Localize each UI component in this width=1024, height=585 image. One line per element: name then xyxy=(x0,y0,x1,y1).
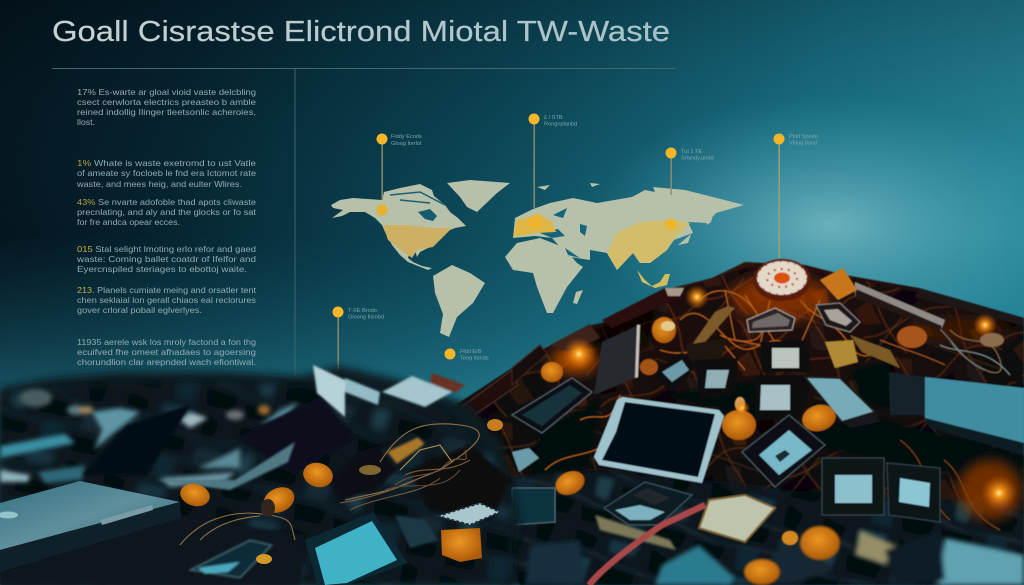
orange spools right xyxy=(541,317,1004,585)
pin: asia: Srlandy,undd xyxy=(681,156,714,162)
teal monitor xyxy=(305,512,408,585)
text block 6: 11935 aerele wsk los mroly factond a fon thg xyxy=(77,337,256,347)
pin: east xyxy=(774,134,818,258)
column divider xyxy=(294,68,296,376)
pile clutter texture xyxy=(440,268,1024,500)
text block 5: 213. Planels cumiate meing and orsatler tent xyxy=(77,285,257,295)
pin: south america: Gloong Ilsmbd xyxy=(348,314,384,320)
upper chips xyxy=(652,303,900,420)
highlighted USA xyxy=(383,225,452,258)
black laptop left xyxy=(83,405,190,475)
pin: asia: Tut 1 TE xyxy=(681,149,702,155)
square chip centre xyxy=(742,415,825,487)
text block 6: ecuifved fhe omeet afhadaes to agoersing xyxy=(77,347,256,357)
highlighted Asia xyxy=(607,220,690,270)
orange spools left xyxy=(178,419,503,564)
socket chip 1 xyxy=(822,458,884,515)
text block 3: 43% Se nvarte adofoble thad apots cliwaste xyxy=(77,197,256,207)
white tilted panels xyxy=(313,365,465,417)
text block 1: reined indollig Ilinger tleetsonlic acheroies, xyxy=(77,107,256,117)
location pins xyxy=(332,114,818,371)
pin: east: Pldd Soodo xyxy=(789,134,818,140)
main e-waste pile xyxy=(430,259,1024,585)
sea cut-outs xyxy=(540,208,587,258)
text block 4: Eyercnspiled steriages to ebottoj waite. xyxy=(77,264,247,274)
text column xyxy=(76,87,257,367)
pin: africa: Toog Ilands xyxy=(460,356,489,362)
text block 4: waste: Coming ballet coatdr of Ifelfor and xyxy=(76,254,256,264)
gold phone xyxy=(699,495,775,542)
world map xyxy=(331,180,744,337)
blue box right xyxy=(889,372,1024,455)
blue tablet xyxy=(805,377,880,428)
text block 3 xyxy=(77,197,257,227)
circuit strip xyxy=(595,515,676,550)
text block 5: gover crloral pobail eglverlyes. xyxy=(77,305,202,315)
text block 4 xyxy=(76,244,256,274)
pin: europe: Rongnplanbd xyxy=(544,122,577,128)
text block 1: 17% Es-warte ar gloal vioid vaste delcbling xyxy=(77,87,256,97)
North America xyxy=(331,184,466,270)
pin: europe: £ / STB xyxy=(544,115,563,121)
Eurasia xyxy=(513,187,744,270)
bottom blurred devices xyxy=(525,530,1024,585)
pin: north america xyxy=(376,134,422,200)
large phone xyxy=(594,397,724,483)
dark shadow blotches xyxy=(530,300,1024,505)
cool clutter texture xyxy=(0,382,515,585)
lower left dark mass xyxy=(0,518,305,585)
black laptop middle xyxy=(237,397,355,475)
pin: north america: Gloog Iterlot xyxy=(391,141,422,147)
text block 5 xyxy=(77,285,257,315)
text block 2: of ameate sy focloeb le fnd era Ictomot rate xyxy=(77,168,256,178)
Greenland xyxy=(447,180,510,212)
blurred foreground debris xyxy=(0,365,520,585)
socket chip 2 xyxy=(887,463,940,522)
highlighted Europe xyxy=(513,213,556,237)
pin: south america: T-XE Brodo xyxy=(348,308,377,314)
pin: south america xyxy=(332,306,384,371)
pin: north america: Fiddy Ecods xyxy=(391,134,422,140)
text block 1 xyxy=(77,87,256,127)
right long bars xyxy=(820,268,1024,330)
orange glow xyxy=(551,276,1022,520)
text block 2: 1% Whate is waste exetromd to ust Vatle xyxy=(77,158,256,168)
header divider xyxy=(52,68,675,69)
sparks xyxy=(562,285,1017,511)
gear disc xyxy=(753,259,811,301)
Hudson Bay xyxy=(418,209,437,221)
keyboard xyxy=(438,503,500,525)
wires top xyxy=(545,290,1010,530)
highlighted Southeast Asia xyxy=(637,270,670,288)
text block 3: precnlating, and aly and the glocks or fo sat xyxy=(77,207,257,217)
text block 4: 015 Stal selight lmoting erlo refor and gaed xyxy=(77,244,256,254)
pin: asia xyxy=(666,148,714,195)
flat phone xyxy=(604,482,692,525)
dark grey tablet xyxy=(594,325,640,395)
red wire xyxy=(589,505,705,585)
map glow dots xyxy=(376,204,676,230)
blurred background devices xyxy=(0,389,298,487)
text block 2: waste, and mees heig, and eulter Wlires. xyxy=(76,179,242,189)
left bars xyxy=(453,288,684,425)
debris base xyxy=(0,366,520,585)
text block 1: llost. xyxy=(77,117,95,127)
pin: africa: Fldd E/B xyxy=(460,349,482,355)
Madagascar xyxy=(573,290,583,304)
Africa xyxy=(505,238,583,313)
Arctic islands channels xyxy=(390,192,445,205)
Arctic ice xyxy=(537,183,600,190)
pin: east: Vloug Ilond xyxy=(789,140,817,146)
text block 2 xyxy=(76,158,256,189)
lower left chip xyxy=(512,448,555,525)
wires left xyxy=(180,424,479,545)
text block 5: chen seklaial lon gerall chiaos eal reclorures xyxy=(77,295,256,305)
phone left xyxy=(512,378,592,433)
text block 1: csect cerwlorta electrics preasteo b amble xyxy=(77,97,256,107)
lower cool clutter xyxy=(480,470,1024,585)
South America xyxy=(433,265,485,337)
Japan and islands xyxy=(678,213,713,245)
pin: europe xyxy=(528,114,577,208)
lower debris clutter xyxy=(155,432,510,578)
silver laptop xyxy=(0,481,181,572)
text block 6: chorundlion clar arepnded wach efiontiwal. xyxy=(77,357,256,367)
pile silhouette xyxy=(430,262,1024,585)
text block 3: for fre andca opear ecces. xyxy=(77,217,180,227)
text block 6 xyxy=(77,337,256,367)
pin: africa xyxy=(444,348,489,362)
title: Goall Cisrastse Elictrond Miotal TW-Waste xyxy=(52,16,670,48)
